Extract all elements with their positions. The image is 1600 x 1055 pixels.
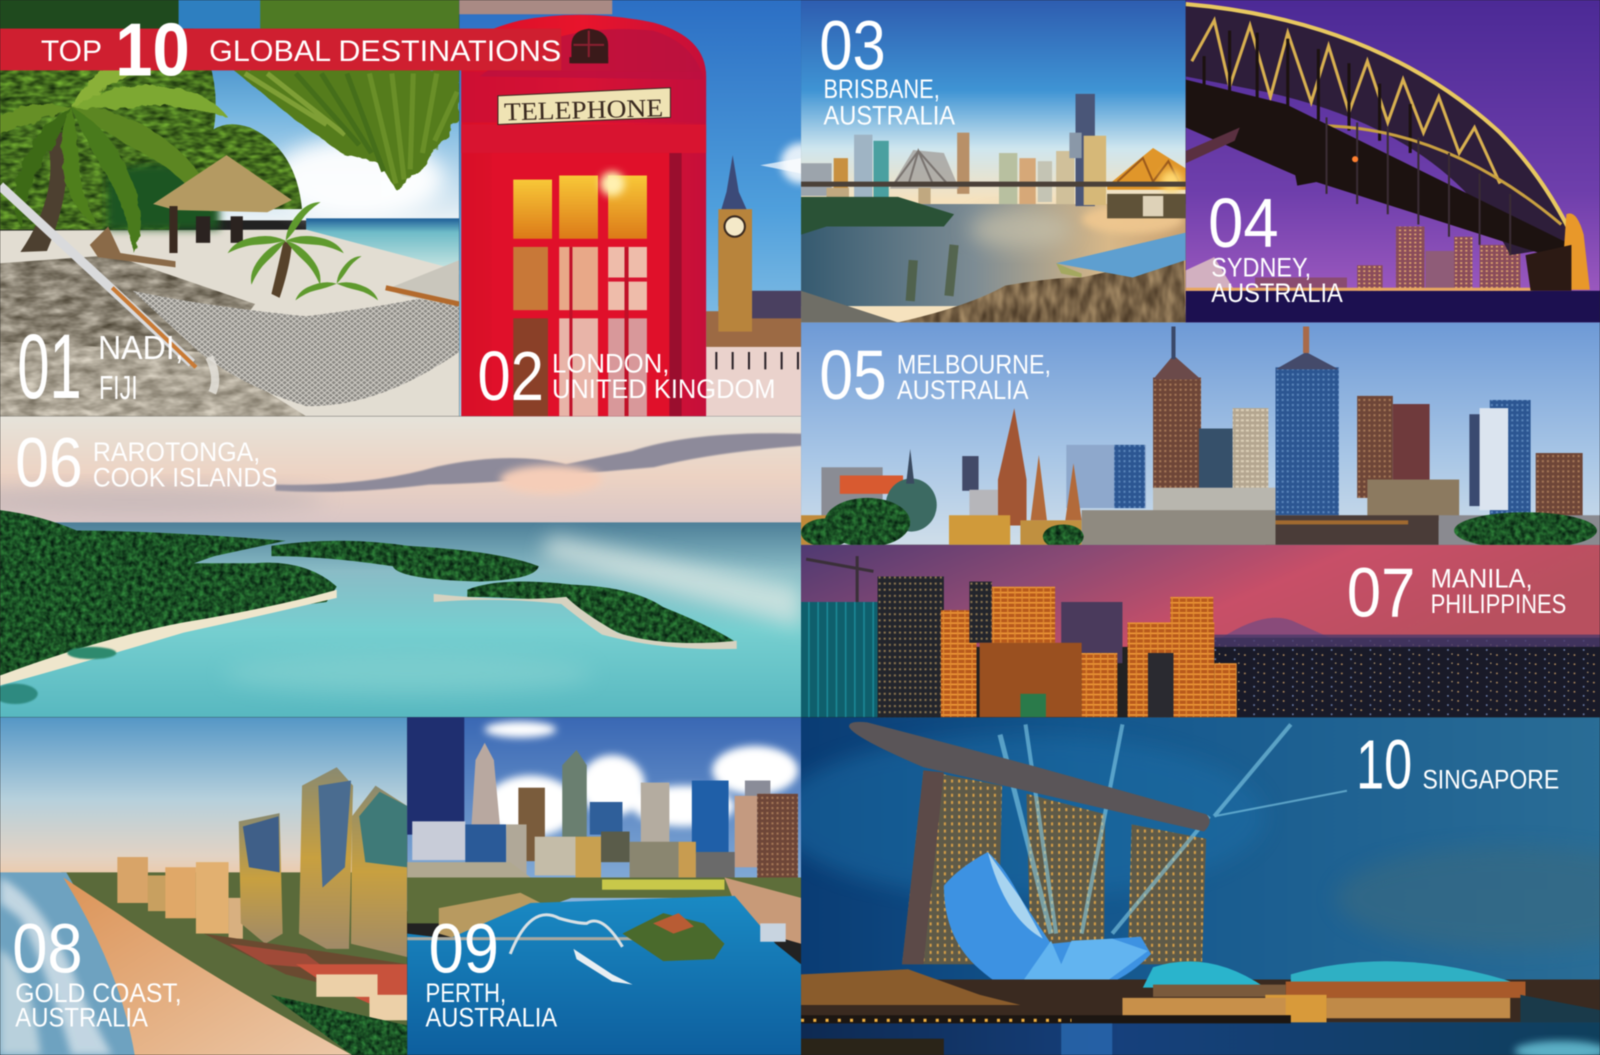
number 02: 02 [478,337,544,415]
label Brisbane, Australia: AUSTRALIA [823,100,955,130]
label Brisbane, Australia: BRISBANE, [823,74,940,104]
title banner: 10 [115,8,190,92]
number 03: 03 [819,6,886,84]
label Perth, Australia: AUSTRALIA [426,1002,557,1032]
number 07: 07 [1347,553,1415,631]
label London, United Kingdom: UNITED KINGDOM [552,374,776,404]
label Rarotonga, Cook Islands: RAROTONGA, [93,437,260,467]
panel 08: Gold Coast, Australia beach towers [0,717,407,1055]
panel 04: Sydney, Australia harbour bridge [1186,0,1600,322]
label Perth, Australia: PERTH, [426,978,506,1008]
label Rarotonga, Cook Islands: COOK ISLANDS [93,463,278,493]
label Melbourne, Australia: AUSTRALIA [897,375,1029,405]
label Sydney, Australia: AUSTRALIA [1211,278,1343,308]
number 05: 05 [819,336,887,414]
panel 02: London, United Kingdom telephone box: TELEPHONE [504,93,664,126]
label Sydney, Australia: SYDNEY, [1211,253,1311,283]
number 06: 06 [15,424,83,502]
panel 10: Singapore Marina Bay Sands [776,717,1600,1055]
label Rarotonga, Cook Islands [93,437,278,493]
number 09: 09 [429,909,499,987]
label London, United Kingdom [552,348,776,404]
label Singapore: SINGAPORE [1422,765,1559,795]
label Gold Coast, Australia: GOLD COAST, [15,978,182,1008]
label Melbourne, Australia [897,349,1051,405]
label Sydney, Australia [1211,253,1343,308]
number 08: 08 [12,909,83,987]
label Nadi, Fiji [98,330,184,407]
title banner: GLOBAL DESTINATIONS [209,35,561,68]
label London, United Kingdom: LONDON, [552,348,669,378]
panel 03: Brisbane, Australia skyline [801,0,1186,322]
panel 06: Rarotonga, Cook Islands lagoon [0,416,801,717]
panel 05: Melbourne, Australia skyline [801,322,1600,549]
number 04: 04 [1208,184,1279,262]
number 01: 01 [17,316,82,418]
panel 09: Perth, Australia waterfront [407,717,801,1055]
label Melbourne, Australia: MELBOURNE, [897,349,1051,379]
panel 02: London, United Kingdom telephone box [459,0,821,416]
label Nadi, Fiji: FIJI [99,370,138,407]
title banner [0,8,561,92]
label Perth, Australia [426,978,557,1032]
label Manila, Philippines: PHILIPPINES [1431,589,1566,619]
label Brisbane, Australia [823,74,955,130]
label Manila, Philippines: MANILA, [1431,564,1533,594]
crown emblem [569,29,608,63]
label Nadi, Fiji: NADI, [98,330,184,367]
label Gold Coast, Australia [15,978,182,1032]
label Manila, Philippines [1431,564,1566,619]
panel 07: Manila, Philippines night skyline [801,545,1600,717]
number 10: 10 [1356,726,1412,804]
label Gold Coast, Australia: AUSTRALIA [15,1002,148,1032]
title banner: TOP [41,35,102,68]
panel 01: Nadi, Fiji beach [0,0,459,418]
